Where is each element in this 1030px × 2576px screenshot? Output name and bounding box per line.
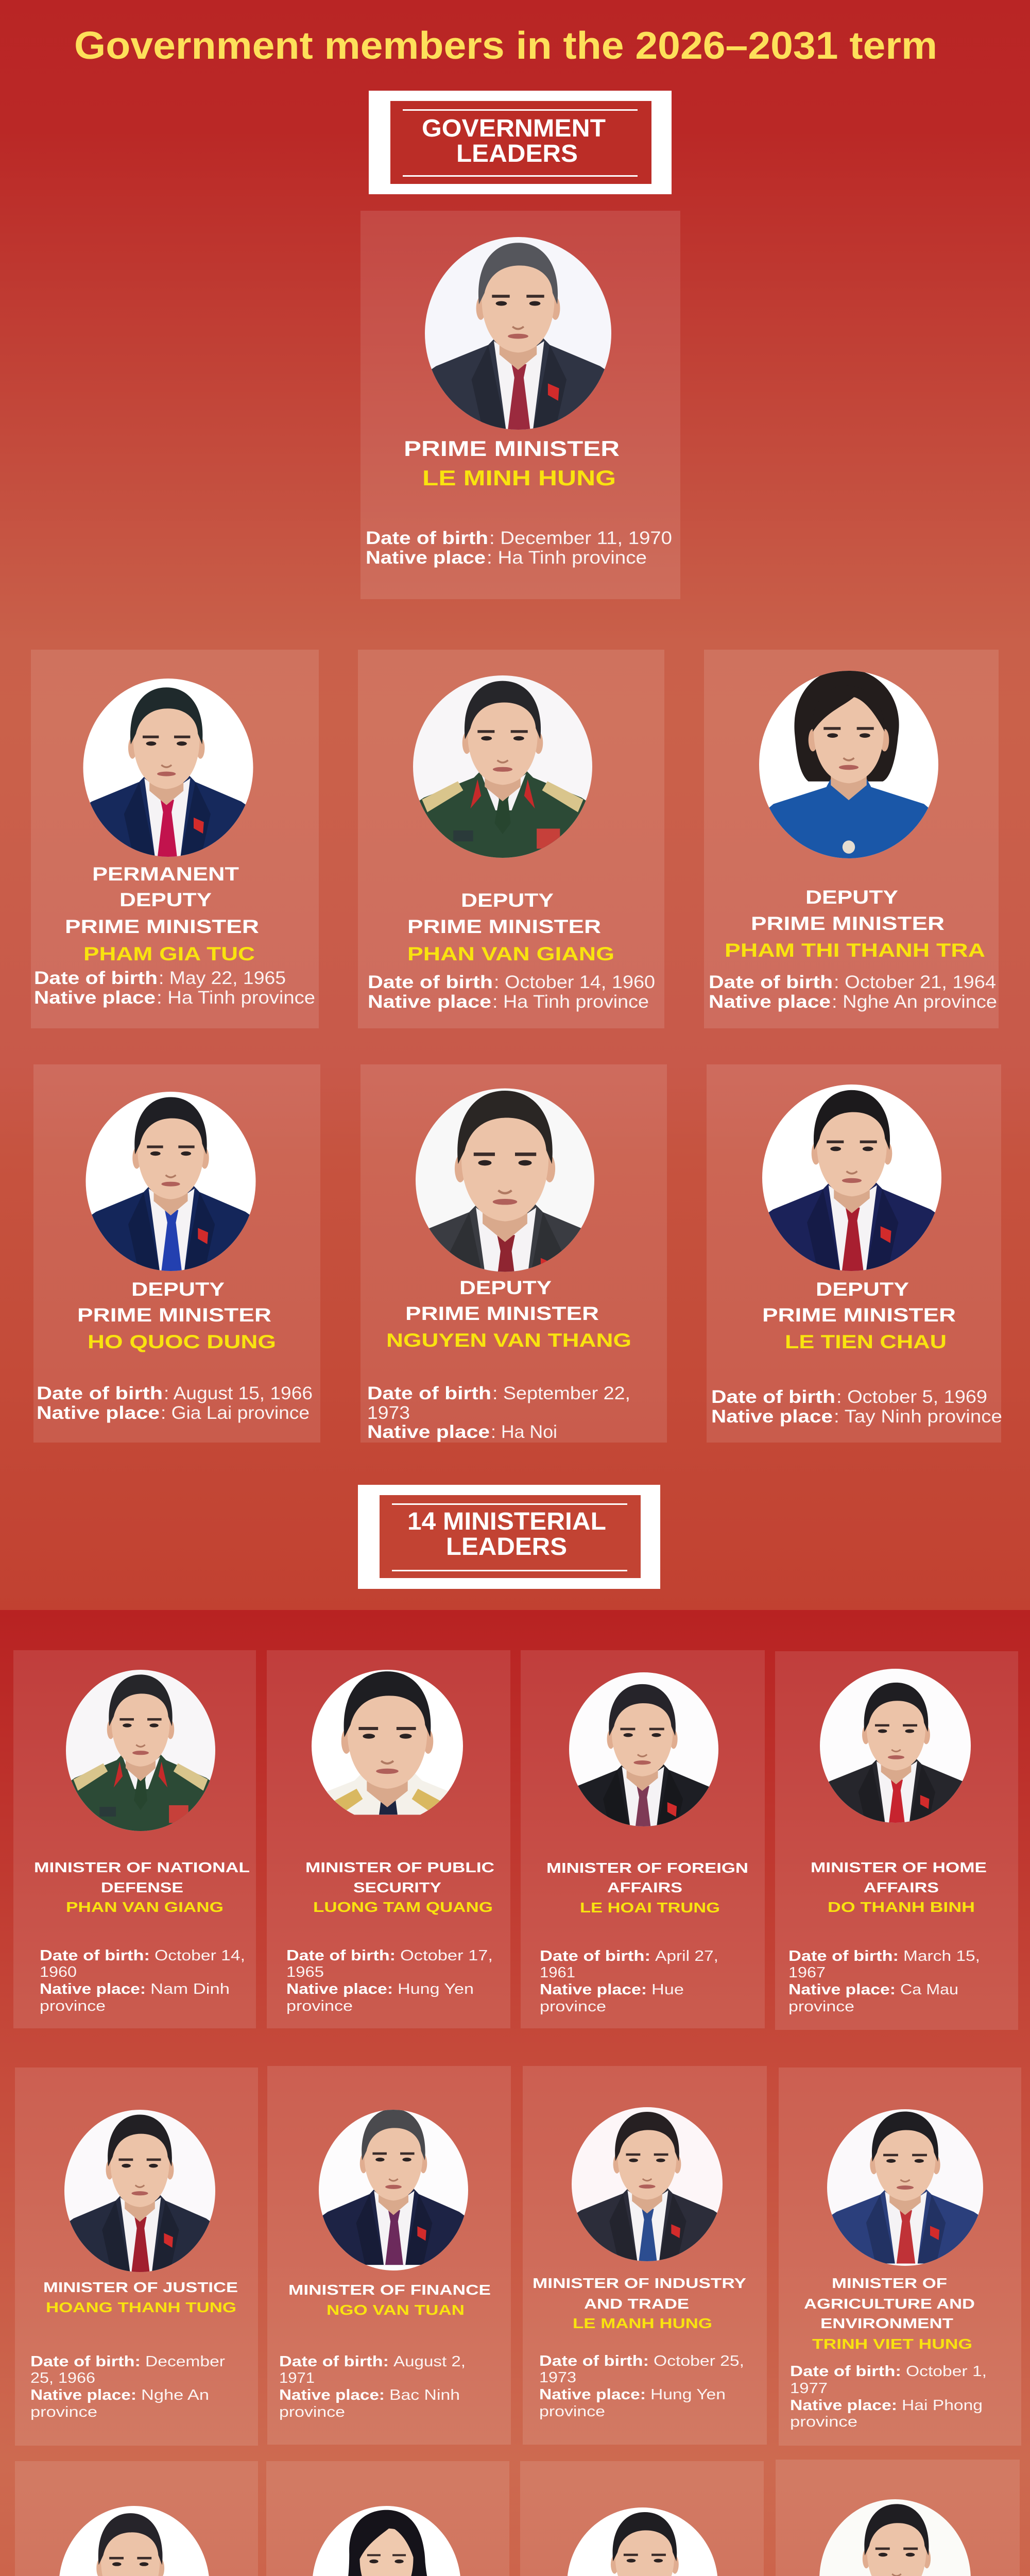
role: PERMANENT — [92, 863, 239, 885]
banner: government leaders: GOVERNMENT — [422, 115, 606, 142]
portrait: Le Manh Hung — [572, 2107, 723, 2261]
portrait: Trinh Viet Hung — [827, 2109, 983, 2266]
role: PRIME MINISTER — [404, 436, 620, 461]
name: PHAM GIA TUC — [83, 943, 255, 964]
details: Date of birth — [367, 1383, 491, 1403]
details: province — [40, 1998, 106, 2014]
details: April 27, — [655, 1948, 718, 1964]
role: PRIME MINISTER — [77, 1304, 271, 1326]
role — [751, 887, 945, 934]
name: TRINH VIET HUNG — [812, 2336, 972, 2352]
details: Hung Yen — [650, 2386, 726, 2403]
details: Date of birth: — [30, 2353, 141, 2370]
panel: deputy prime minister Le Tien Chau — [707, 1064, 1002, 1443]
banner: government leaders — [369, 91, 672, 194]
details: Hai Phong — [902, 2397, 983, 2414]
role — [305, 1859, 494, 1895]
panel: deputy prime minister Phan Van Giang — [358, 650, 664, 1028]
panel: minister of finance — [267, 2066, 511, 2445]
role — [65, 863, 259, 937]
portrait: Ho Quoc Dung — [85, 1092, 255, 1271]
role: DEPUTY — [459, 1277, 552, 1298]
portrait: Phan Van Giang — [413, 675, 592, 858]
details: Date of birth — [37, 1383, 163, 1403]
role: AFFAIRS — [864, 1879, 939, 1895]
role — [34, 1859, 250, 1895]
details: Native place: — [30, 2387, 136, 2403]
banner: 14 ministerial leaders: LEADERS — [446, 1533, 567, 1561]
details: : Gia Lai province — [161, 1403, 310, 1423]
details: Native place — [711, 1406, 833, 1427]
name: PHAN VAN GIANG — [66, 1899, 224, 1915]
details — [40, 1947, 245, 2014]
details: : December 11, 1970 — [489, 528, 672, 548]
role: MINISTER OF FINANCE — [288, 2282, 491, 2298]
role — [762, 1279, 956, 1326]
details: : Tay Ninh province — [834, 1406, 1002, 1427]
details: province — [788, 1998, 854, 2015]
role: MINISTER OF — [832, 2275, 947, 2291]
details: Native place — [367, 1422, 490, 1442]
details — [368, 972, 655, 1012]
role: MINISTER OF NATIONAL — [34, 1859, 250, 1875]
details: Native place: — [540, 1981, 647, 1998]
details: : October 21, 1964 — [834, 972, 996, 992]
details — [788, 1948, 980, 2015]
panel: minister of construction — [15, 2461, 258, 2576]
panel: minister of foreign affairs — [521, 1650, 765, 2028]
details: 1977 — [790, 2380, 828, 2397]
role: DEPUTY — [461, 890, 554, 911]
portrait: Tran Hong Minh — [55, 2506, 210, 2576]
panel: deputy prime minister Ho Quoc Dung — [33, 1064, 320, 1443]
details: Hue — [651, 1981, 684, 1998]
role: MINISTER OF JUSTICE — [43, 2279, 238, 2295]
portrait: Le Tien Chau — [762, 1084, 941, 1271]
role: MINISTER OF INDUSTRY — [533, 2275, 746, 2291]
details: province — [539, 2403, 605, 2420]
details: Nghe An — [141, 2387, 209, 2403]
details: Date of birth: — [540, 1948, 650, 1964]
details: Date of birth — [709, 972, 833, 992]
details: Native place — [34, 988, 156, 1008]
details: province — [540, 1998, 606, 2015]
role: AND TRADE — [584, 2296, 689, 2312]
name: LE HOAI TRUNG — [580, 1900, 720, 1916]
role — [77, 1279, 271, 1326]
panel: minister of agriculture and environment — [779, 2067, 1021, 2446]
details: Native place: — [790, 2397, 897, 2414]
name: HO QUOC DUNG — [88, 1331, 276, 1352]
portrait: Vu Hai Quan — [567, 2507, 720, 2576]
role — [546, 1860, 748, 1895]
details: Native place: — [40, 1981, 146, 1997]
role: AGRICULTURE AND — [804, 2296, 975, 2312]
details: October 1, — [906, 2363, 987, 2380]
details: : Ha Tinh province — [492, 992, 649, 1012]
details: Native place: — [788, 1981, 896, 1998]
details: Date of birth: — [279, 2353, 389, 2370]
details — [790, 2363, 987, 2430]
role — [804, 2275, 975, 2331]
role: DEPUTY — [816, 1279, 909, 1300]
details: Bac Ninh — [389, 2387, 460, 2403]
panel: minister of justice — [15, 2067, 258, 2446]
portrait: Le Minh Hung — [425, 237, 611, 430]
role — [405, 1277, 599, 1324]
name: LE MANH HUNG — [573, 2315, 712, 2331]
portrait: Hoang Thanh Tung — [64, 2110, 215, 2272]
portrait: Do Thanh Binh — [820, 1669, 971, 1832]
details: Date of birth: — [40, 1947, 150, 1964]
panel: prime minister — [360, 211, 680, 599]
details: Date of birth: — [790, 2363, 901, 2380]
portrait: Pham Thi Thanh Tra — [759, 669, 938, 858]
details: 1961 — [540, 1964, 575, 1981]
name: NGO VAN TUAN — [327, 2302, 465, 2318]
role: SECURITY — [353, 1879, 441, 1895]
details: March 15, — [903, 1948, 980, 1964]
details: : Ha Tinh province — [487, 548, 647, 568]
panel: permanent deputy prime minister — [31, 650, 319, 1028]
panel: deputy prime minister Nguyen Van Thang — [360, 1064, 667, 1443]
details — [540, 1948, 718, 2015]
panel: minister of industry and trade — [523, 2066, 767, 2445]
portrait: Le Hoai Trung — [564, 1672, 720, 1841]
details — [709, 972, 997, 1012]
details: Native place: — [286, 1981, 393, 1997]
role: MINISTER OF PUBLIC — [305, 1859, 494, 1875]
details: 1965 — [286, 1964, 324, 1980]
role: MINISTER OF HOME — [811, 1859, 987, 1875]
role: PRIME MINISTER — [762, 1304, 956, 1326]
details: December — [145, 2353, 225, 2370]
details — [34, 968, 315, 1008]
details: 1973 — [539, 2369, 576, 2386]
name: NGUYEN VAN THANG — [386, 1330, 631, 1351]
portrait: Pham Gia Tuc — [81, 679, 253, 860]
details: : Nghe An province — [832, 992, 997, 1012]
details — [30, 2353, 225, 2420]
details: Ca Mau — [900, 1981, 958, 1998]
details: Native place: — [539, 2386, 646, 2403]
panel: minister of science and technology — [520, 2461, 764, 2576]
details — [279, 2353, 466, 2420]
details: 25, 1966 — [30, 2370, 95, 2386]
details: Native place — [37, 1403, 160, 1423]
name: PHAN VAN GIANG — [407, 943, 614, 964]
details: Date of birth — [368, 972, 493, 992]
details: : August 15, 1966 — [164, 1383, 313, 1403]
portrait: Nguyen Kim Son — [819, 2499, 972, 2576]
panel: minister of public security — [267, 1650, 510, 2028]
role: DEPUTY — [119, 889, 212, 910]
name: DO THANH BINH — [828, 1899, 975, 1915]
role: ENVIRONMENT — [820, 2315, 953, 2331]
details — [366, 528, 672, 568]
details: 1973 — [367, 1403, 410, 1423]
details: Native place — [368, 992, 491, 1012]
role: DEPUTY — [805, 887, 898, 908]
portrait: Nguyen Van Thang — [416, 1088, 594, 1272]
details: Date of birth — [366, 528, 488, 548]
panel: minister of culture, sports and tourism — [266, 2461, 509, 2576]
details — [286, 1947, 493, 2014]
details: Native place: — [279, 2387, 385, 2403]
details: Date of birth: — [539, 2353, 649, 2369]
name: LE TIEN CHAU — [785, 1331, 947, 1352]
portrait: Phan Van Giang — [66, 1670, 215, 1831]
details: October 14, — [154, 1947, 245, 1964]
details: October 17, — [400, 1947, 493, 1964]
name: HOANG THANH TUNG — [46, 2299, 236, 2315]
name: LUONG TAM QUANG — [313, 1899, 493, 1915]
details: : Ha Tinh province — [157, 988, 315, 1008]
details: October 25, — [654, 2353, 744, 2369]
panel: minister of home affairs — [775, 1651, 1018, 2030]
details: : Ha Noi — [491, 1422, 557, 1442]
banner: 14 ministerial leaders: 14 MINISTERIAL — [407, 1508, 606, 1535]
details: province — [30, 2404, 97, 2420]
role: PRIME MINISTER — [751, 913, 945, 934]
details: August 2, — [393, 2353, 466, 2370]
details: 1967 — [788, 1964, 826, 1981]
details: province — [286, 1998, 353, 2014]
role: PRIME MINISTER — [407, 916, 601, 937]
details: Date of birth: — [788, 1948, 899, 1964]
details: Date of birth — [711, 1387, 835, 1407]
role: AFFAIRS — [607, 1879, 682, 1895]
role: DEPUTY — [131, 1279, 225, 1300]
details — [37, 1383, 313, 1423]
details: Native place — [366, 548, 486, 568]
role — [407, 890, 601, 937]
details: 1971 — [279, 2370, 315, 2386]
role — [811, 1859, 987, 1895]
details: Native place — [709, 992, 831, 1012]
portrait: Lam Thi Phuong Thanh — [312, 2506, 461, 2576]
details — [539, 2353, 744, 2420]
details — [711, 1387, 1002, 1427]
role: PRIME MINISTER — [405, 1303, 599, 1324]
details: : May 22, 1965 — [159, 968, 286, 988]
role: DEFENSE — [101, 1879, 183, 1895]
details: province — [790, 2414, 857, 2430]
details — [367, 1383, 630, 1442]
details: : October 14, 1960 — [494, 972, 655, 992]
role: MINISTER OF FOREIGN — [546, 1860, 748, 1876]
details: : September 22, — [492, 1383, 630, 1403]
panel: deputy prime minister Pham Thi Thanh Tra — [704, 650, 999, 1028]
details: province — [279, 2404, 345, 2420]
panel: minister of national defense — [13, 1650, 256, 2028]
name: LE MINH HUNG — [422, 466, 616, 490]
panel: minister of education and training — [776, 2460, 1020, 2576]
details: 1960 — [40, 1964, 77, 1980]
details: Date of birth: — [286, 1947, 396, 1964]
portrait: Ngo Van Tuan — [319, 2109, 468, 2270]
details: Date of birth — [34, 968, 158, 988]
role — [533, 2275, 746, 2312]
banner: government leaders: LEADERS — [456, 140, 578, 167]
title: Government members in the 2026–2031 term — [74, 24, 937, 67]
banner: 14 ministerial leaders — [358, 1485, 660, 1589]
role: PRIME MINISTER — [65, 916, 259, 937]
name: PHAM THI THANH TRA — [725, 940, 985, 961]
details: Nam Dinh — [150, 1981, 230, 1997]
details: Hung Yen — [398, 1981, 474, 1997]
details: : October 5, 1969 — [836, 1387, 987, 1407]
portrait: Luong Tam Quang — [312, 1670, 463, 1815]
